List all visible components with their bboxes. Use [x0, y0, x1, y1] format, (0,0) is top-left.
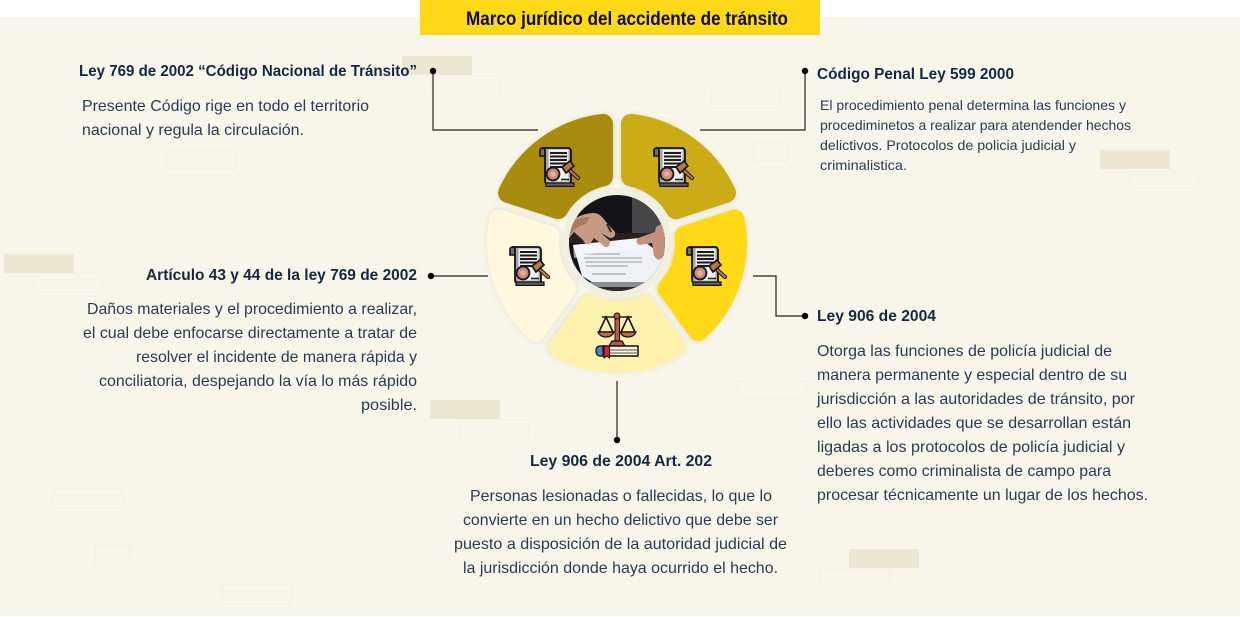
text block: Ley 906 de 2004: manera permanente y especial dentro de su: [817, 367, 1127, 384]
text block: Ley 906 de 2004: procesar técnicamente un lugar de los hechos.: [817, 487, 1148, 504]
text block: Código Penal: El procedimiento penal determina las funciones y: [820, 97, 1126, 113]
text block: Ley 906 de 2004: ello las actividades que se desarrollan están: [817, 415, 1131, 432]
text block: Artículo 43 y 44: resolver el incidente de manera rápida y: [136, 349, 417, 366]
text block: Ley 906 de 2004: Ley 906 de 2004: [817, 308, 936, 325]
text block: Código Penal: criminalistica.: [820, 157, 907, 173]
text block: Ley 906 de 2004 Art. 202: puesto a disposición de la autoridad judicial de: [454, 536, 787, 553]
text block: Ley 906 de 2004 Art. 202: Ley 906 de 2004 Art. 202: [530, 453, 712, 470]
connector: left: [428, 273, 488, 279]
segment: left: [459, 206, 586, 331]
text block: Ley 906 de 2004 Art. 202: convierte en un hecho delictivo que debe ser: [463, 512, 779, 529]
text block: Ley 906 de 2004: ligadas a los protocolos de policía judicial y: [817, 439, 1125, 456]
connector: bottom: [614, 381, 620, 443]
text block: Artículo 43 y 44: [83, 267, 417, 414]
center photo: hands signing a document: [569, 195, 665, 293]
decorative note blocks: [4, 56, 1170, 568]
text block: Ley 906 de 2004 Art. 202: [454, 453, 787, 577]
connector: top right: [700, 68, 808, 130]
text block: Artículo 43 y 44: Artículo 43 y 44 de la ley 769 de 2002: [146, 267, 417, 284]
segment: top left: [508, 102, 618, 219]
text block: Código Penal: delictivos. Protocolos de policia judicial y: [820, 137, 1076, 153]
connector: right: [753, 276, 808, 319]
title banner: Marco jurídico del accidente de tránsito: [466, 9, 788, 30]
text block: Ley 769 de 2002: Ley 769 de 2002 “Código Nacional de Tránsito”: [79, 63, 417, 80]
icon: scroll and gavel, left: [510, 247, 548, 285]
icon: scales of justice on book: [596, 313, 638, 358]
text block: Ley 906 de 2004: [816, 308, 1148, 504]
text block: Ley 769 de 2002: nacional y regula la circulación.: [82, 122, 304, 139]
text block: Artículo 43 y 44: conciliatoria, despejando la vía lo más rápido: [99, 373, 417, 390]
connector: top left: [430, 68, 538, 130]
text block: Código Penal: [817, 66, 1131, 173]
text block: Artículo 43 y 44: posible.: [361, 397, 417, 414]
segment: bottom: [549, 279, 676, 403]
text block: Ley 906 de 2004 Art. 202: la jurisdicción donde haya ocurrido el hecho.: [463, 560, 778, 577]
text block: Ley 769 de 2002: Presente Código rige en todo el territorio: [82, 98, 369, 115]
text block: Ley 906 de 2004: Otorga las funciones de policía judicial de: [817, 343, 1112, 360]
text block: Código Penal: Código Penal Ley 599 2000: [817, 66, 1014, 83]
segment: top right: [631, 124, 726, 209]
wheel diagram: [486, 113, 748, 374]
icon: scroll and gavel, top left: [540, 148, 578, 186]
icon: scroll and gavel, right: [687, 247, 725, 285]
text block: Ley 769 de 2002: [79, 63, 417, 139]
icon: scroll and gavel, top right: [654, 148, 692, 186]
text block: Código Penal: procediminetos a realizar para atendender hechos: [820, 117, 1131, 133]
text block: Ley 906 de 2004 Art. 202: Personas lesionadas o fallecidas, lo que lo: [470, 488, 772, 505]
text block: Ley 906 de 2004: jurisdicción a las autoridades de tránsito, por: [816, 391, 1136, 408]
text block: Artículo 43 y 44: el cual debe enfocarse directamente a tratar de: [83, 325, 417, 342]
title banner: [420, 0, 820, 35]
text block: Artículo 43 y 44: Daños materiales y el procedimiento a realizar,: [87, 301, 417, 318]
center ring: [562, 188, 672, 298]
text block: Ley 906 de 2004: deberes como criminalista de campo para: [817, 463, 1111, 480]
segment: right: [654, 219, 764, 336]
